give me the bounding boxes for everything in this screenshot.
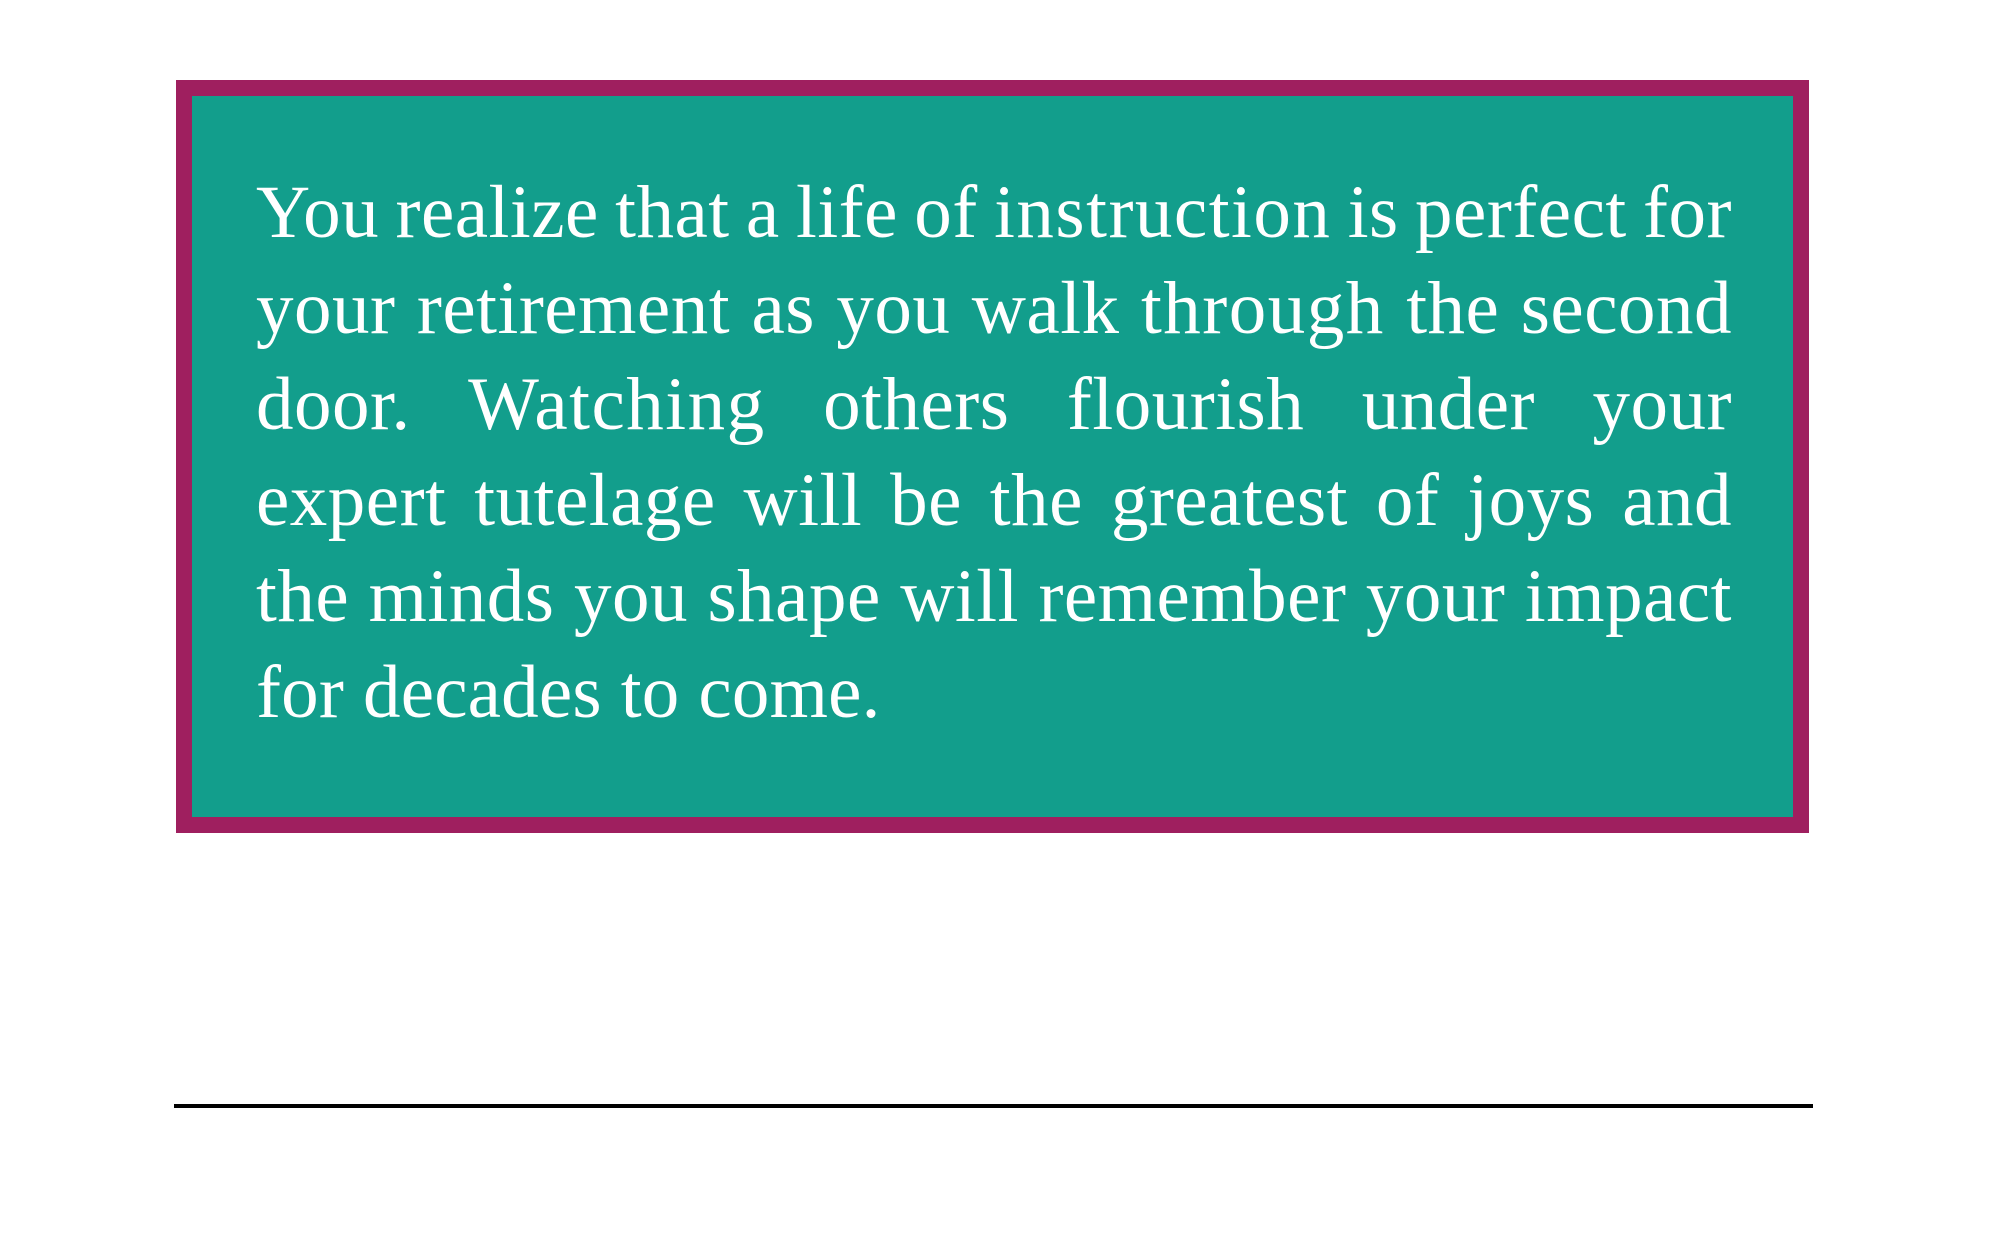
text block: second door paragraph: door. Watching others flourish under your [256,363,1732,446]
text block: second door paragraph: the minds you shape will remember your impact [256,555,1732,638]
text block: second door paragraph: for decades to come. [256,651,881,734]
text block: second door paragraph: expert tutelage will be the greatest of joys and [256,459,1732,542]
text block: second door paragraph: You realize that a life of instruction is perfect for [256,170,1732,254]
panel: teal callout with magenta border [176,80,1809,833]
text block: second door paragraph [256,170,1732,734]
text block: second door paragraph: your retirement as you walk through the second [256,267,1732,350]
horizontal rule [174,1104,1813,1108]
